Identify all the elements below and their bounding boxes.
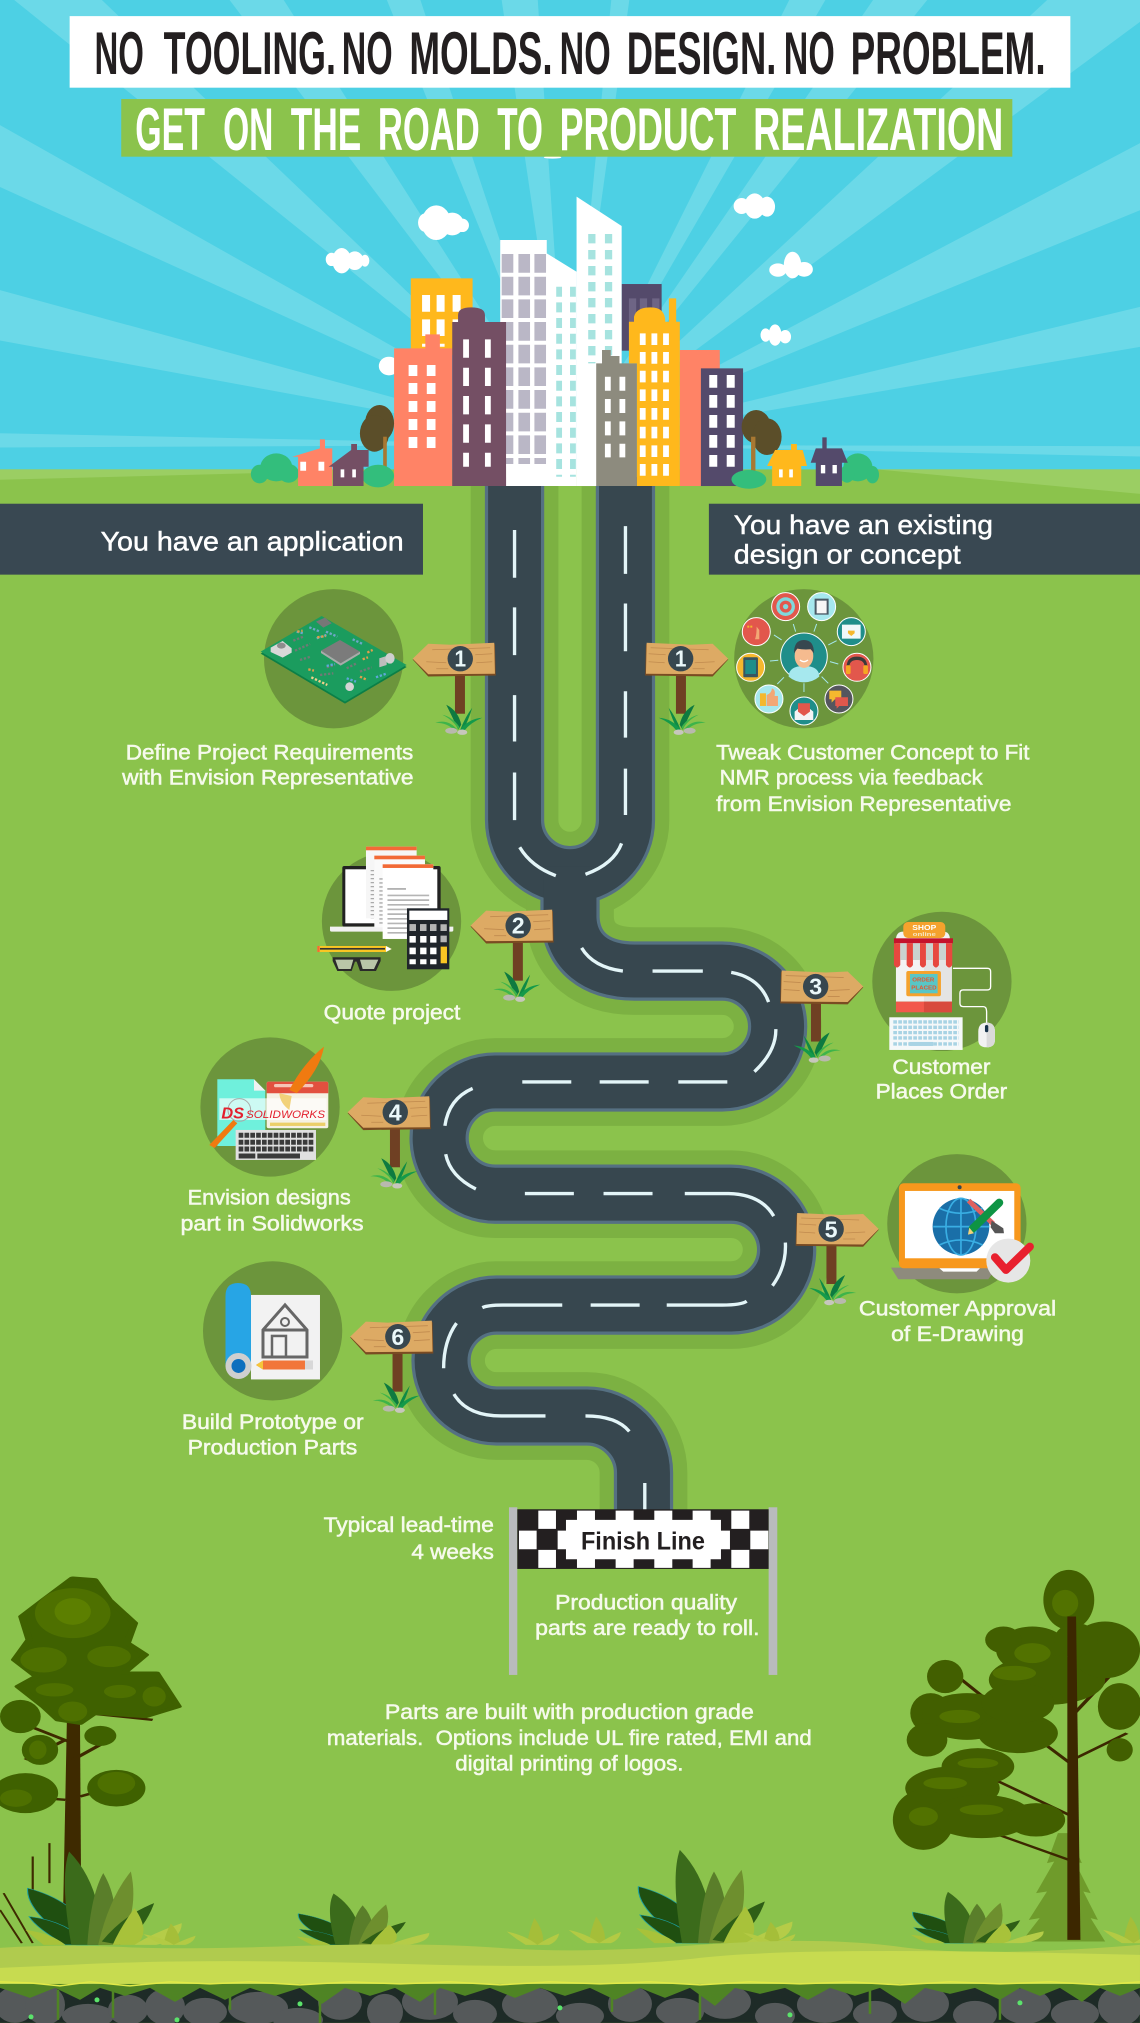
text: customer approval <box>859 1296 1056 1346</box>
icon: online shop order: ORDER <box>912 978 934 984</box>
right tree <box>893 1570 1140 1942</box>
left tree <box>0 1578 178 1943</box>
wooden sign 1 left: 1 <box>454 646 466 672</box>
text: customer approval: Customer Approval <box>859 1296 1056 1320</box>
text: lead time <box>324 1513 494 1564</box>
icon: online shop order: PLACED <box>911 986 937 992</box>
road surface <box>439 477 787 1515</box>
plant: middle small <box>296 1894 429 1945</box>
subtitle bar <box>121 96 1012 163</box>
clouds <box>326 156 813 375</box>
text: quote project: Quote project <box>324 1001 460 1025</box>
text: customer places order: Customer <box>892 1055 990 1079</box>
icon: online shop order: online <box>913 932 936 938</box>
icon: customer concept wheel <box>734 589 873 728</box>
wooden sign 3: 3 <box>809 973 822 999</box>
banner: existing design or concept <box>709 504 1140 575</box>
grass band <box>0 1941 1140 1984</box>
text: parts built with production grade materials <box>327 1700 812 1776</box>
text: production quality: Production quality <box>555 1590 737 1614</box>
text: tweak customer concept: from Envision Representative <box>716 792 1011 816</box>
banner: you have an application <box>0 504 423 575</box>
text: customer approval: of E-Drawing <box>891 1322 1024 1346</box>
text: parts built with production grade materials: materials. Options include UL fire rated, EMI and <box>327 1726 812 1750</box>
subtitle bar: GET <box>135 96 205 163</box>
subtitle bar: ROAD <box>378 96 480 163</box>
road halo <box>439 477 787 1515</box>
wooden sign 4 <box>348 1096 431 1188</box>
text: build prototype: Production Parts <box>188 1436 357 1460</box>
subtitle bar: ON <box>223 96 273 163</box>
plant: right small <box>911 1892 1044 1943</box>
city skyline <box>251 156 879 489</box>
wooden sign 5 <box>796 1213 879 1305</box>
bottom ground strip with rocks <box>0 1941 1140 2023</box>
wooden sign 2 <box>471 910 554 1002</box>
houses <box>292 439 332 486</box>
wooden sign 1 right: 1 <box>675 646 687 672</box>
sky background with sun rays <box>0 0 1140 484</box>
subtitle bar: THE <box>291 96 361 163</box>
text: tweak customer concept: NMR process via feedback <box>720 766 983 790</box>
text: lead time: Typical lead-time <box>324 1513 494 1537</box>
text: tweak customer concept <box>716 741 1030 816</box>
banner: you have an application: You have an application <box>101 526 404 557</box>
rock layer <box>0 1982 1140 2023</box>
text: define project requirements: Define Project Requirements <box>126 741 413 765</box>
wooden sign 2: 2 <box>512 913 525 939</box>
lane markings <box>444 526 785 1510</box>
icon: circuit board <box>261 589 407 728</box>
icon: online shop order <box>872 912 1012 1051</box>
road edge <box>439 477 787 1515</box>
text: envision designs part: part in Solidworks <box>181 1211 364 1235</box>
text: envision designs part <box>181 1185 364 1235</box>
subtitle bar: REALIZATION <box>753 96 1003 163</box>
wooden sign 6: 6 <box>391 1324 404 1350</box>
mossy drip edge <box>0 1978 1140 2006</box>
icon: solidworks design: DS <box>221 1105 244 1122</box>
trees and bushes <box>365 405 394 442</box>
winding road <box>439 477 787 1515</box>
text: production quality <box>535 1590 760 1640</box>
subtitle bar: TO <box>497 96 543 163</box>
wooden sign 4: 4 <box>389 1100 402 1126</box>
icon: blueprint and pencil <box>203 1261 342 1401</box>
text: tweak customer concept: Tweak Customer Concept to Fit <box>716 741 1030 765</box>
title bar: NO <box>560 19 611 87</box>
title bar: NO <box>95 19 144 87</box>
text: customer places order: Places Order <box>876 1080 1007 1104</box>
front buildings <box>394 334 452 486</box>
icon: e-drawing approval laptop <box>887 1154 1030 1293</box>
wooden sign 1 left <box>413 643 496 735</box>
plant: far left big <box>25 1852 182 1945</box>
wooden sign 6 <box>350 1321 433 1413</box>
finish line banner: Finish Line <box>581 1528 705 1555</box>
text: define project requirements: with Envision Representative <box>121 766 414 790</box>
title bar: NO <box>342 19 393 87</box>
subtitle bar: PRODUCT <box>560 96 736 163</box>
wooden sign 3 <box>780 971 863 1063</box>
title bar: NO <box>784 19 835 87</box>
text: build prototype <box>182 1410 364 1460</box>
text: build prototype: Build Prototype or <box>182 1410 364 1434</box>
icon: solidworks design <box>200 1037 340 1177</box>
banner: existing design or concept: design or concept <box>734 539 961 570</box>
plant: centre big <box>636 1850 793 1943</box>
back buildings <box>411 278 473 355</box>
wooden sign 5: 5 <box>825 1216 838 1242</box>
text: customer places order <box>876 1055 1007 1104</box>
text: define project requirements <box>121 741 414 790</box>
text: parts built with production grade materials: Parts are built with production grade <box>385 1700 754 1724</box>
title bar: MOLDS. <box>409 19 553 87</box>
icon: online shop order: SHOP <box>912 923 936 932</box>
text: lead time: 4 weeks <box>411 1540 494 1564</box>
title bar <box>70 16 1070 88</box>
banner: existing design or concept: You have an existing <box>734 509 993 540</box>
moss highlight <box>0 1982 1140 1986</box>
wooden sign 1 right <box>645 643 728 735</box>
text: production quality: parts are ready to roll. <box>535 1616 760 1640</box>
text: parts built with production grade materials: digital printing of logos. <box>455 1752 683 1776</box>
title bar: DESIGN. <box>627 19 776 87</box>
icon: quote documents and calculator <box>317 847 461 991</box>
title bar: TOOLING. <box>164 19 336 87</box>
finish line banner <box>509 1507 777 1675</box>
bright grass band <box>0 1951 1140 1984</box>
icon: solidworks design: SOLIDWORKS <box>246 1109 326 1121</box>
small lime plants <box>143 1917 1140 1945</box>
text: envision designs part: Envision designs <box>188 1185 351 1209</box>
green ground <box>0 469 1140 2023</box>
